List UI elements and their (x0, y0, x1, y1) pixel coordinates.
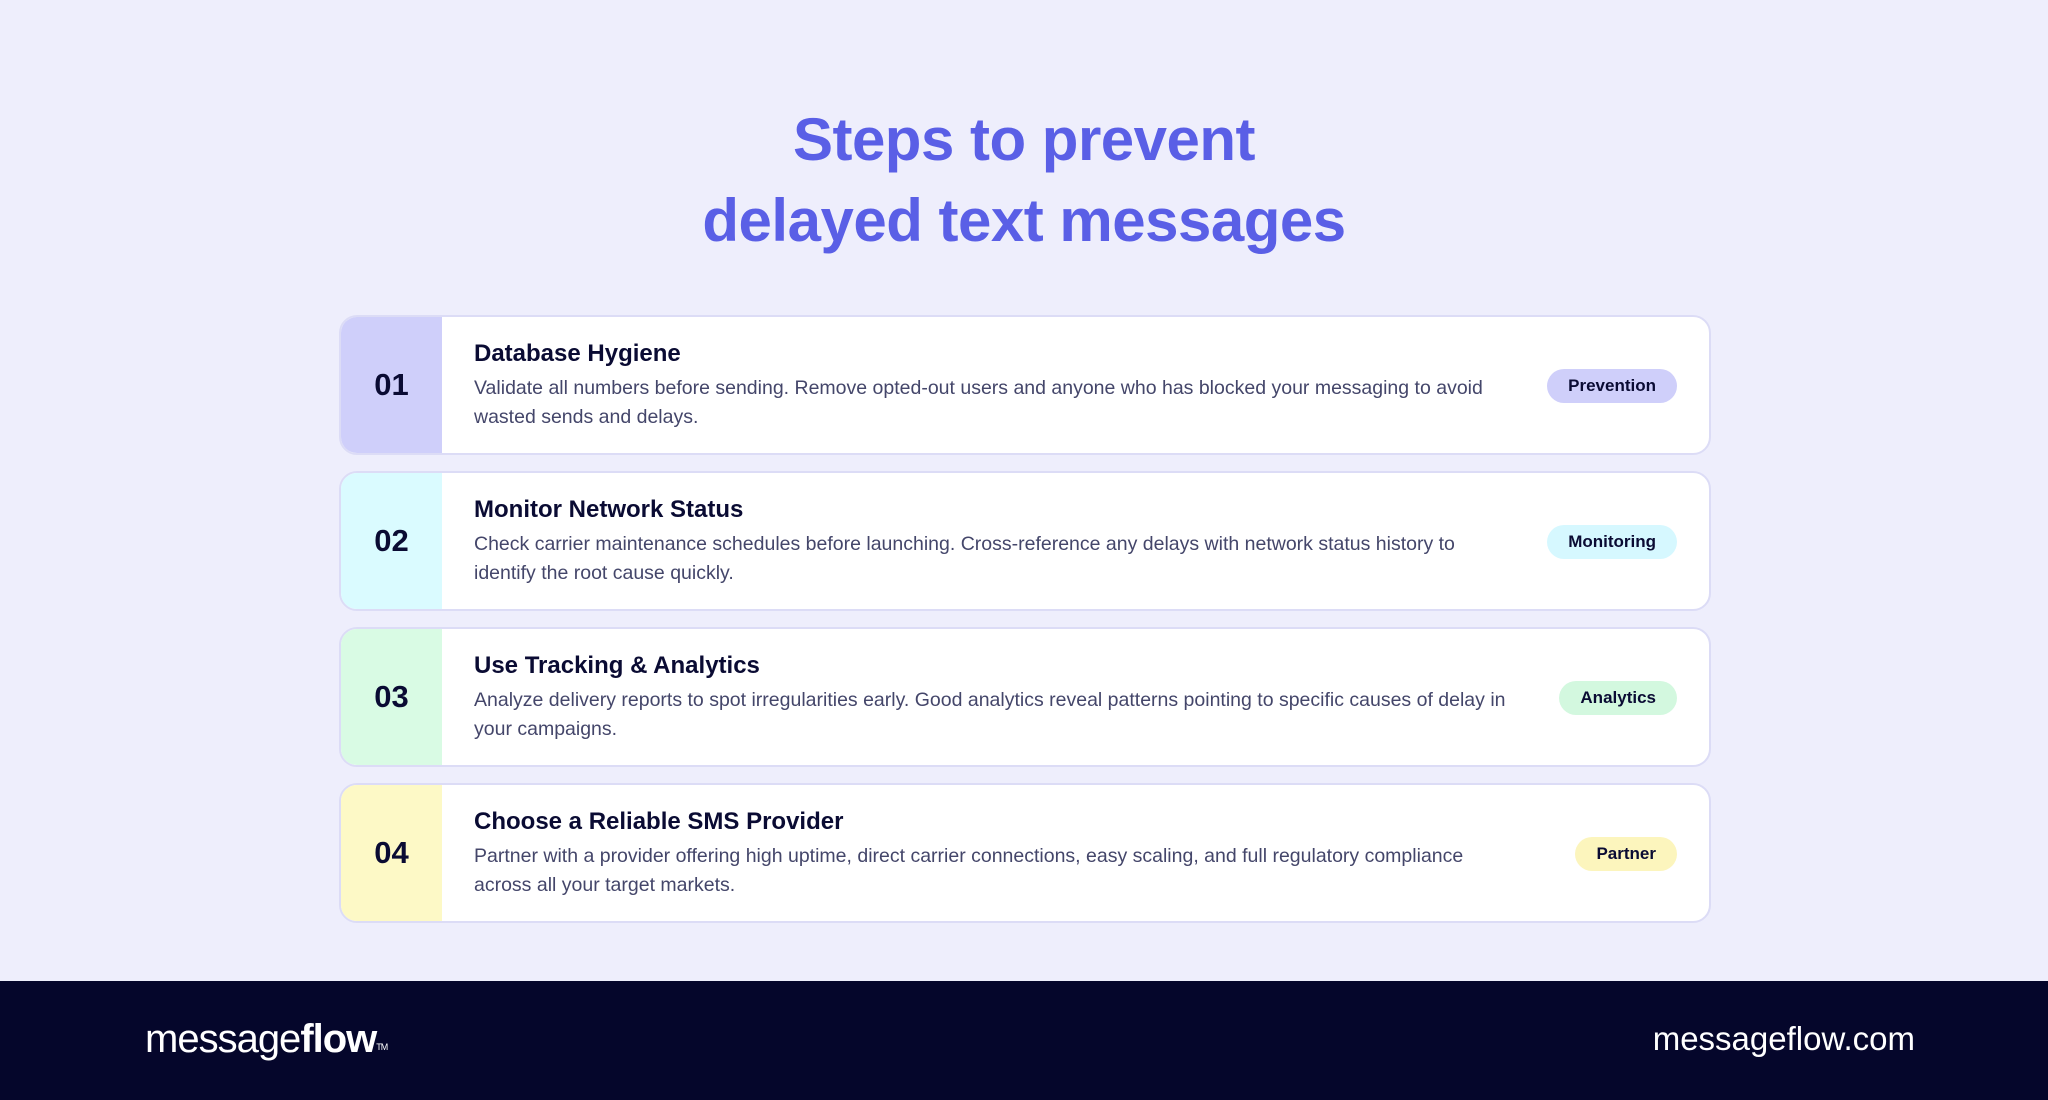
number 02 (341, 473, 442, 609)
badge: Analytics (1580, 688, 1656, 707)
card 04 (339, 783, 1711, 923)
number 01 (341, 317, 442, 453)
heading: Database Hygiene (474, 340, 681, 367)
badge: Prevention (1568, 376, 1656, 395)
number 01: 01 (374, 367, 409, 402)
description: Check carrier maintenance schedules before launching. Cross-reference any delays with network status history to identify the root cause quickly. (474, 533, 1455, 584)
card 03 (339, 627, 1711, 767)
number 04: 04 (374, 835, 409, 870)
title: delayed text messages (702, 187, 1346, 254)
description: Analyze delivery reports to spot irregularities early. Good analytics reveal patterns pointing to specific causes of delay in your campaigns. (474, 689, 1506, 740)
badge: Partner (1596, 844, 1656, 863)
number 02: 02 (374, 523, 409, 558)
badge (1547, 525, 1677, 559)
logo: messageflowTM (145, 1017, 387, 1061)
heading: Use Tracking & Analytics (474, 652, 760, 679)
card 01 (339, 315, 1711, 455)
badge (1547, 369, 1677, 403)
number 04 (341, 785, 442, 921)
website url: messageflow.com (1653, 1020, 1915, 1057)
description: Partner with a provider offering high uptime, direct carrier connections, easy scaling, and full regulatory compliance across all your target markets. (474, 845, 1463, 896)
number 03: 03 (374, 679, 409, 714)
number 03 (341, 629, 442, 765)
badge: Monitoring (1568, 532, 1656, 551)
badge (1575, 837, 1677, 871)
heading: Choose a Reliable SMS Provider (474, 808, 843, 835)
badge (1559, 681, 1677, 715)
card 02 (339, 471, 1711, 611)
heading: Monitor Network Status (474, 496, 743, 523)
title (702, 106, 1346, 254)
footer (0, 981, 2048, 1100)
description: Validate all numbers before sending. Remove opted-out users and anyone who has blocked your messaging to avoid wasted sends and delays. (474, 377, 1483, 428)
title: Steps to prevent (793, 106, 1255, 173)
